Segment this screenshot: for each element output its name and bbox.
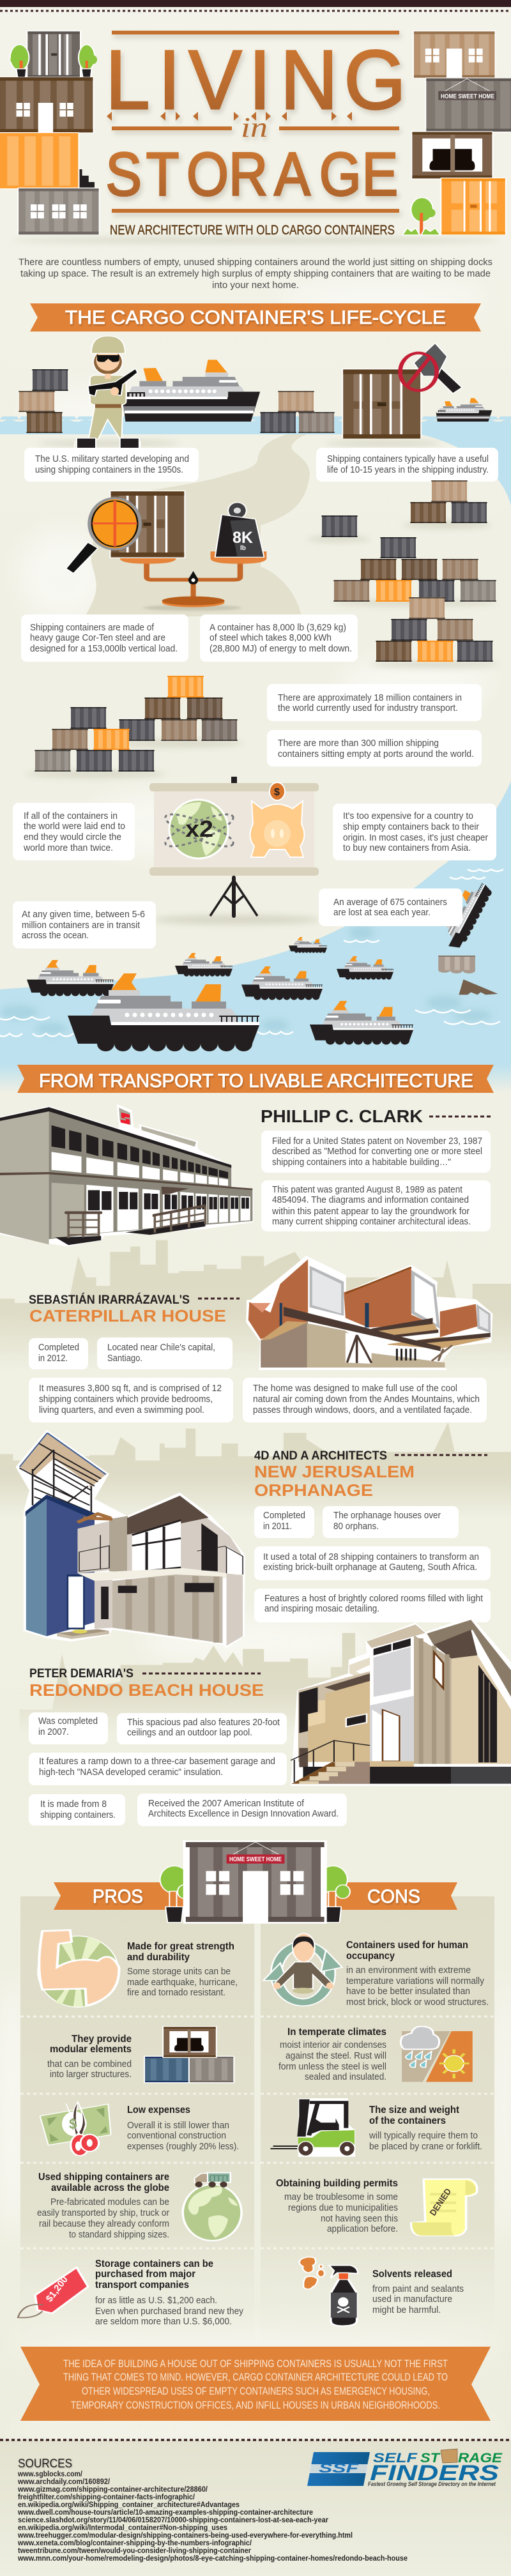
pro: low expenses [41,2101,239,2156]
pro: available across the globe: rail because they already conform [39,2218,169,2229]
callout: location [97,1338,233,1369]
pro: low expenses: Low expenses [127,2105,190,2115]
icon: price tag [18,2267,88,2318]
beige road [85,434,310,616]
con: human occupancy: occupancy [346,1951,395,1962]
heading: caterpillar house: SEBASTIÁN IRARRÁZAVAL'S [29,1293,190,1307]
callout: completed 2012 [29,1338,88,1369]
icon: flexed arm [38,1930,119,2007]
icon: brown container [111,491,184,558]
container stacks right [321,480,496,662]
pro: low expenses: $ [69,2116,77,2132]
callout: ramp [29,1753,287,1785]
callout: location: Located near Chile's capital, [107,1342,215,1353]
banner: cons [319,1882,457,1910]
pro: price: purchased from major [95,2269,195,2280]
callout: circle the world: end they would circle the [24,832,121,842]
con: human occupancy: Containers used for human [346,1940,468,1951]
pro: strength: Made for great strength [127,1941,234,1952]
callout: in transit [13,901,156,949]
icon: billboard with globe and piggy bank [149,777,319,918]
pro: available across the globe: Used shipping containers are [38,2172,169,2183]
callout: size [29,1378,233,1422]
callout: size: shipping containers which provide bedrooms, [39,1394,213,1405]
callout: completed 2011 [254,1506,314,1538]
title word: living: LIVING [105,33,406,127]
callout: orphans: The orphanage houses over [333,1510,441,1521]
callout: 18 million: the world currently used for industry transport. [278,703,458,713]
weight label: lb [240,545,246,552]
con: solvents [300,2257,464,2326]
logo: self storage finders: RAGE [458,2451,503,2465]
callout: 8 containers [29,1794,125,1825]
illustration: left container stack [0,31,99,234]
icon: magnifying glass [67,498,140,573]
skyline backgrounds [0,1240,511,1733]
sources list: www.xeneta.com/blog/container-shipping-by-the-numbers-infographic/ [17,2538,252,2547]
callout: completed 2011: Completed [263,1510,305,1521]
callout: patent filed: Filed for a United States patent on November 23, 1987 [272,1136,482,1147]
waves [0,869,503,1036]
sources list [17,2457,408,2563]
callout: spacious pad: This spacious pad also features 20-foot [127,1717,280,1728]
con: human occupancy: have to be better insulated than [346,1986,470,1997]
banner: cons: CONS [367,1886,420,1907]
callout: circle the world: If all of the containers in [24,811,118,821]
pro: price: transport companies [95,2280,189,2290]
pro: modular: They provide [72,2034,132,2045]
callout: useful life: life of 10-15 years in the shipping industry. [327,464,489,475]
icon: piggy bank [250,782,305,857]
con: temperate climates: sealed and insulated. [305,2071,386,2082]
callout: completed 2012: in 2012. [38,1353,68,1364]
icon: rain and sun [400,2027,473,2082]
pro: strength: made earthquake, hurricane, [127,1977,238,1988]
panel: pros background [20,1896,254,2340]
callout: in transit: across the ocean. [22,930,89,941]
con: permits: not having seen this [321,2213,398,2224]
pro: price: Even when purchased brand new they [95,2306,243,2317]
illustration: soldier ship and containers [19,337,492,450]
sources list: SOURCES [18,2457,72,2471]
icon: spray bottle [300,2257,358,2326]
heading: redondo beach house: REDONDO BEACH HOUSE [29,1680,264,1700]
pro: price: are seldom more than U.S. $6,000. [95,2316,232,2327]
pro: price: Storage containers can be [95,2259,213,2269]
pro: modular: that can be combined [47,2059,132,2069]
con: temperate climates: moist interior air condenses [280,2039,386,2050]
callout: patent filed [261,1131,491,1173]
sources list: www.treehugger.com/modular-design/shipping-containers-being-used-everywhere-for-everything.html [17,2531,353,2540]
intro paragraph: taking up space. The result is an extremely high surplus of empty shipping containers that are waiting to be made [20,268,491,279]
callout: energy: (28,800 MJ) of energy to melt down. [210,643,352,654]
ships fleet [27,937,413,1051]
pro: modular: modular elements [50,2044,132,2055]
callout: patent granted: within this patent appear to lay the groundwork for [271,1206,469,1217]
sinking ship [434,876,494,952]
callout: patent granted: This patent was granted August 8, 1989 as patent [272,1184,463,1195]
heading: new jerusalem orphanage [254,1449,487,1500]
callout: 8 containers: shipping containers. [40,1810,116,1820]
pro: modular [47,2027,233,2082]
callout: completed 2007: Was completed [38,1716,98,1726]
intro paragraph: There are countless numbers of empty, unused shipping containers around the world just sitting on shipping docks [19,257,492,268]
logo: self storage finders: SSF [319,2462,359,2476]
heading: Phillip C. Clark: PHILLIP C. CLARK [261,1106,423,1126]
callout: ramp: It features a ramp down to a three-car basement garage and [39,1756,275,1767]
sources list: www.gizmag.com/shipping-container-architecture/28860/ [17,2485,208,2494]
icon: truck on globe [183,2173,241,2241]
banner: pros [54,1882,198,1910]
callout: patent filed: shipping containers into a habitable building…" [272,1157,451,1168]
callout: design [243,1378,487,1422]
sources list: en.wikipedia.org/wiki/Shipping_container_architecture#Advantages [18,2500,240,2509]
callout: too expensive: to buy new containers from Asia. [343,842,471,853]
callout: size: It measures 3,800 sq ft, and is comprised of 12 [39,1383,222,1394]
pro: available across the globe: available across the globe [51,2183,169,2193]
sunken containers [438,956,498,995]
callout: circle the world [13,803,135,860]
top bar [0,0,511,7]
con: temperate climates: form unless the steel is well [278,2061,386,2072]
callout: 18 million: There are approximately 18 million containers in [278,692,462,703]
callout: 18 million [267,684,482,721]
callout: completed 2007 [29,1712,108,1744]
con: solvents: from paint and sealants [372,2283,464,2294]
callout: patent granted [261,1180,491,1231]
pro: strength: fire and tornado resistant. [127,1987,225,1998]
con: size and weight: be placed by crane or forklift. [369,2141,482,2152]
heading: caterpillar house [29,1293,240,1325]
intro paragraph [19,257,492,291]
icon: person with temperature arrows [263,1934,342,2002]
icon: soldier [75,337,139,450]
sign text: home sweet home: HOME SWEET HOME [441,93,494,100]
weight label: 8K [233,529,253,547]
callout: orphans: 80 orphans. [333,1521,379,1532]
logo: self storage finders: FINDERS [370,2461,499,2485]
title word: in: in [241,112,268,143]
illustration: right container stack [404,31,511,234]
illustration: scale comparing container and weight [67,491,266,611]
callout: completed 2011: in 2011. [263,1521,292,1532]
pro: low expenses: expenses (roughly 20% less). [127,2141,239,2152]
callout: design: natural air coming down from the Andes Mountains, which [253,1394,480,1405]
callout: useful life [316,448,498,482]
banner: pros: PROS [93,1886,143,1907]
pro: strength [38,1930,238,2007]
callout: patent granted: many current shipping container architectural ideas. [272,1216,471,1227]
callout: energy: of steel which takes 8,000 kWh [210,632,332,643]
pro: modular: into larger structures. [50,2069,132,2080]
callout: colored rooms [254,1589,491,1622]
callout: lost at sea [319,888,462,926]
callout: circle the world: the world were laid end to [24,821,125,832]
callout: spacious pad: ceilings and an outdoor lap pool. [127,1727,252,1738]
pro: available across the globe: easily transported by ship, truck or [37,2207,169,2218]
icon: denied scroll: DENIED [427,2186,453,2218]
callout: too expensive: origin. In most cases, it's just cheaper [343,832,488,843]
intro paragraph: into your next home. [212,280,299,291]
icon: home sweet home container with trees [161,1842,349,1922]
con: temperate climates: In temperate climates [287,2027,386,2038]
icon: no demolition axe [400,344,461,393]
sources list: www.archdaily.com/160892/ [17,2477,111,2486]
icon: cut dollar bill [41,2101,110,2156]
con: temperate climates: against the steel. Rust will [286,2050,386,2061]
callout: colored rooms: Features a host of brightly colored rooms filled with light [264,1593,484,1604]
callout: in transit: At any given time, between 5-6 [22,909,145,920]
conclusion banner [20,2347,491,2421]
callout: energy [200,614,358,662]
heading: caterpillar house: CATERPILLAR HOUSE [29,1306,226,1325]
con: size and weight: The size and weight [369,2105,459,2115]
con: human occupancy: most brick, block or wood structures. [346,1997,489,2008]
callout: colored rooms: and inspiring mosaic detailing. [264,1603,379,1614]
sign text: home sweet home: HOME SWEET HOME [229,1856,282,1863]
heading: new jerusalem orphanage: 4D AND A ARCHITECTS [254,1449,387,1463]
callout: 300 million: containers sitting empty at ports around the world. [278,749,474,759]
logo: self storage finders: ST [420,2451,441,2465]
icon: modular containers [145,2027,233,2082]
callout: award: Received the 2007 American Institute of [148,1798,305,1809]
icon: globe: x2 [185,816,213,842]
banner: life-cycle heading [30,303,481,332]
icon: 8K weight [216,503,263,557]
sources list: www.mnn.com/your-home/remodeling-design/photos/8-eye-catching-shipping-container-homes/redondo-beach-house [17,2554,408,2563]
icon: price tag: $1,200 [44,2275,70,2304]
pro: strength: Some storage units can be [127,1966,231,1977]
callout: steel [21,614,188,662]
con: permits [276,2178,477,2236]
panel: cons background [261,1896,494,2340]
logo: self storage finders [307,2449,503,2488]
callout: patent granted: 4854094. The diagrams and information contained [272,1194,469,1205]
pro: available across the globe: to standard shipping sizes. [69,2229,169,2240]
illustration: redondo beach house [291,1617,511,1786]
callout: design: The home was designed to make full use of the cool [253,1383,457,1394]
con: temperate climates [278,2027,473,2082]
con: permits: may be troublesome in some [284,2191,398,2202]
callout: 300 million [267,730,482,766]
sources list: freightfilter.com/shipping-container-facts-infographic/ [18,2492,195,2501]
con: human occupancy [263,1934,489,2008]
callout: too expensive: ship empty containers back to their [343,821,479,832]
callout: in transit: million containers are in transit [22,920,141,931]
con: human occupancy: in an environment with extreme [346,1965,471,1976]
sea background [0,781,511,1093]
banner: life-cycle heading: THE CARGO CONTAINER'S LIFE-CYCLE [65,307,446,328]
con: size and weight [270,2098,482,2157]
sources list: en.wikipedia.org/wiki/Intermodal_container#Non-shipping_uses [18,2523,227,2532]
heading: new jerusalem orphanage: NEW JERUSALEM [254,1462,415,1481]
icon: forklift [270,2098,355,2157]
banner: transport heading: FROM TRANSPORT TO LIVABLE ARCHITECTURE [39,1071,473,1092]
heading: new jerusalem orphanage: ORPHANAGE [254,1481,373,1500]
callout: steel: Shipping containers are made of [30,622,155,633]
sources list: www.dwell.com/house-tours/article/10-amazing-examples-shipping-container-architecture [17,2508,313,2517]
con: solvents: used in manufacture [372,2294,452,2305]
sources list: science.slashdot.org/story/11/04/06/0158207/10000-shipping-containers-lost-at-sea-each-year [18,2515,328,2524]
callout: steel: designed for a 153,000lb vertical load. [30,643,178,654]
pro: strength: and durability [127,1952,190,1963]
callout: energy: A container has 8,000 lb (3,629 kg) [210,622,346,633]
callout: circle the world: world more than twice. [23,842,113,853]
icon: globe [162,800,236,858]
icon: piggy bank: $ [274,787,280,798]
callout: spacious pad [117,1713,287,1744]
logo: self storage finders: SELF [373,2451,418,2465]
pro: available across the globe: Pre-fabricated modules can be [50,2197,169,2207]
con: size and weight: of the containers [369,2115,446,2126]
illustration: caterpillar house [246,1256,492,1370]
callout: too expensive [333,804,496,860]
callout: lost at sea: An average of 675 containers [333,897,447,908]
callout: location: Santiago. [107,1353,142,1364]
callout: patent filed: described as "Method for converting one or more steel [272,1146,482,1157]
pro: available across the globe [37,2172,241,2241]
callout: steel: heavy gauge Cor-Ten steel and are [30,632,165,643]
sources list: www.sgblocks.com/ [17,2469,83,2478]
callout: completed 2007: in 2007. [38,1726,69,1737]
callout: 8 containers: It is made from 8 [40,1799,107,1810]
sources list: tweentribune.com/tween/would-you-consider-living-shipping-container [18,2546,251,2555]
callout: size: living quarters, and even a swimming pool. [39,1405,204,1415]
callout: 28 containers: existing brick-built orphanage at Gauteng, South Africa. [263,1562,477,1573]
callout: orphans [323,1506,459,1538]
callout: military [24,448,199,482]
pro: low expenses: conventional construction [127,2130,226,2141]
callout: 28 containers: It used a total of 28 shipping containers to transform an [263,1551,479,1562]
callout: military: The U.S. military started developing and [35,453,189,464]
pro: price: for as little as U.S. $1,200 each. [95,2295,217,2306]
callout: useful life: Shipping containers typically have a useful [327,453,489,464]
callout: award [137,1794,347,1826]
title word: storage: STORAGE [105,141,398,209]
callout: design: passes through windows, doors, and a ventilated façade. [253,1405,472,1415]
callout: completed 2012: Completed [38,1342,79,1353]
callout: ramp: high-tech "NASA developed ceramic" insulation. [39,1767,223,1778]
con: permits: Obtaining building permits [276,2178,398,2189]
subtitle: NEW ARCHITECTURE WITH OLD CARGO CONTAINERS [110,223,395,238]
callout: award: Architects Excellence in Design Innovation Award. [148,1808,339,1819]
heading: redondo beach house: PETER DEMARIA'S [29,1667,133,1680]
heading: redondo beach house [29,1667,264,1700]
illustration: orphanage [15,1429,245,1648]
con: permits: application before. [327,2223,398,2234]
con: human occupancy: temperature variations will normally [346,1976,484,1986]
icon: denied scroll [411,2179,477,2236]
con: permits: regions due to municipalities [288,2202,398,2213]
callout: 28 containers [254,1546,491,1580]
con: size and weight: will typically require them to [369,2130,478,2141]
container stacks left [34,676,238,772]
con: solvents: Solvents released [372,2269,452,2280]
illustration: Phillip Clark building [0,1104,254,1247]
footer background [0,2440,511,2576]
water strip [0,416,511,506]
pro: price [18,2259,243,2327]
callout: too expensive: It's too expensive for a country to [343,811,473,821]
callout: 300 million: There are more than 300 million shipping [278,738,439,749]
callout: lost at sea: are lost at sea each year. [333,907,431,918]
pro: low expenses: Overall it is still lower than [127,2120,229,2131]
con: solvents: might be harmful. [372,2305,441,2315]
callout: military: using shipping containers in the 1950s. [35,464,183,475]
illustration: brown container [343,369,420,439]
title [105,31,406,213]
